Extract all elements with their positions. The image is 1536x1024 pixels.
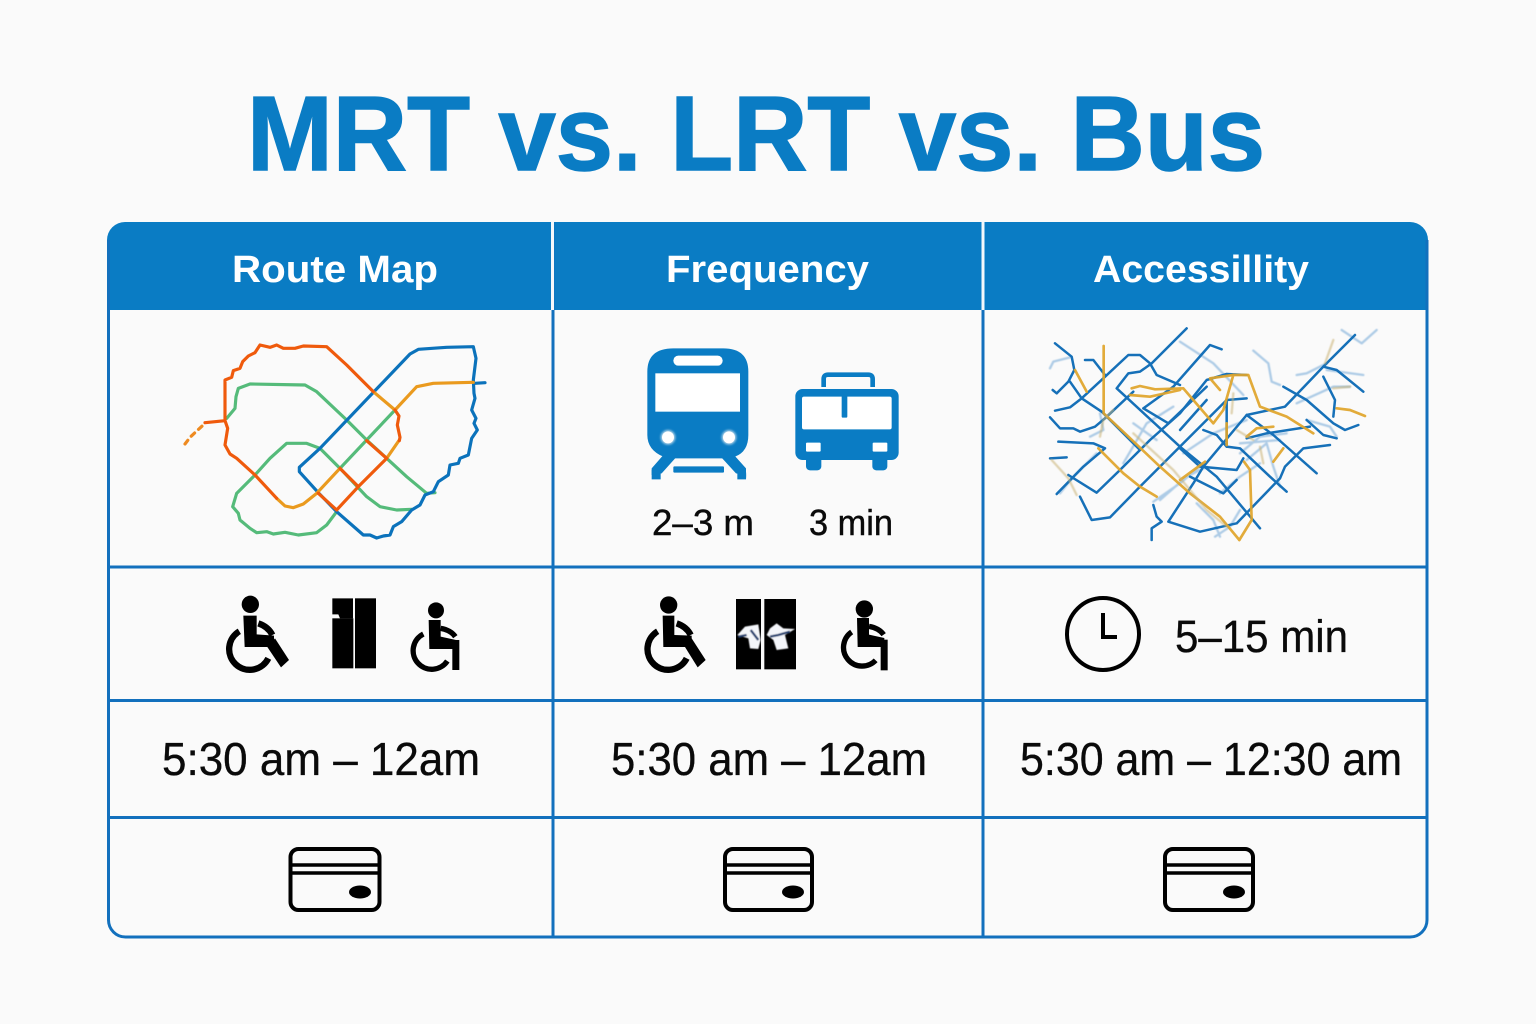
train frequency: 2–3 m — [652, 502, 754, 543]
icon: payment card 2 — [725, 849, 812, 910]
blue lines — [1050, 328, 1363, 540]
header: frequency: Frequency — [666, 249, 869, 291]
bus frequency: 3 min — [809, 502, 893, 543]
red line — [205, 345, 400, 510]
icon: train — [647, 348, 748, 479]
icon: wheelchair — [647, 596, 706, 670]
header: route map: Route Map — [232, 249, 438, 291]
hours: bus: 5:30 am – 12:30 am — [1020, 733, 1402, 785]
icon: elevator — [332, 598, 376, 668]
bus network map — [1050, 328, 1377, 540]
amber line — [277, 382, 473, 508]
green connector — [340, 410, 395, 468]
green line upper — [227, 384, 435, 493]
icon: payment card 1 — [290, 849, 380, 910]
bus wait time: 5–15 min — [1175, 611, 1348, 662]
faint gold lines — [1052, 340, 1350, 527]
header row — [107, 222, 1428, 310]
icon: payment card 3 — [1165, 849, 1253, 910]
green line lower — [233, 443, 412, 535]
comparison table — [107, 222, 1428, 937]
header: accessibility: Accessillity — [1093, 249, 1309, 291]
icon: bus — [795, 375, 899, 470]
dashed branch — [185, 424, 204, 444]
icon: clock — [1067, 598, 1139, 670]
icon: wheelchair — [229, 596, 289, 670]
title: MRT vs. LRT vs. Bus — [247, 75, 1265, 193]
accessibility row: column 2 — [647, 596, 888, 670]
blue line — [299, 347, 485, 538]
icon: wheelchair small — [844, 600, 888, 670]
accessibility row: column 1 — [229, 596, 459, 670]
hours: MRT: 5:30 am – 12am — [162, 733, 480, 785]
route map diagram — [185, 345, 485, 538]
icon: wheelchair small — [413, 602, 459, 670]
icon: elevator with glitch — [736, 599, 796, 669]
hours: LRT: 5:30 am – 12am — [611, 733, 927, 785]
gold lines — [1075, 346, 1365, 540]
faint lines — [1050, 330, 1377, 537]
